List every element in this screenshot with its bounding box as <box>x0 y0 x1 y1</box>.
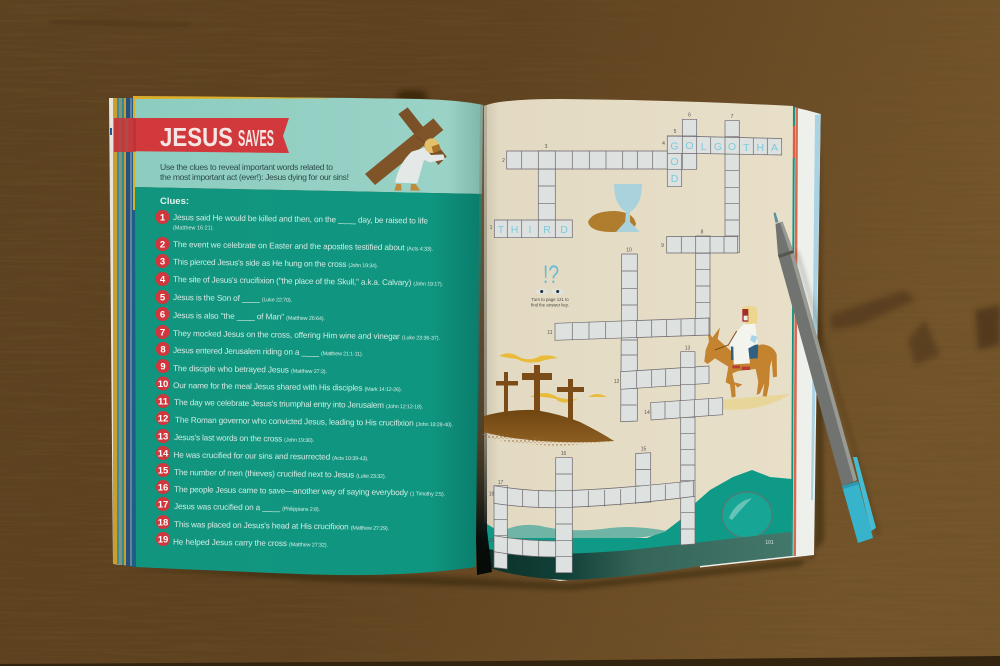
crossword clue numbers: 7 <box>731 114 734 120</box>
crossword clue numbers: 16 <box>561 451 566 457</box>
crossword clue numbers: 9 <box>661 243 664 249</box>
left page: lower teal panel <box>135 187 482 575</box>
clue 9: 9 <box>160 362 166 372</box>
clue 19: 19 <box>158 534 168 546</box>
crossword clue numbers <box>489 112 734 544</box>
clue 11: 11 <box>158 396 169 408</box>
crossword clue numbers: 13 <box>685 346 690 352</box>
clue 16: The people Jesus came to save—another way of saying everybody (1 Timothy 2:5). <box>174 485 445 498</box>
clue 13: Jesus's last words on the cross (John 19:30). <box>174 433 314 444</box>
word 15 down <box>636 453 651 503</box>
clue 4: The site of Jesus's crucifixion ("the place of the Skull," a.k.a. Calvary) (John 19:17). <box>173 275 443 288</box>
crossword clue numbers: 4 <box>662 141 665 147</box>
clue 17: Jesus was crucified on a ____ (Philippians 2:8). <box>174 502 320 513</box>
clue 17: 17 <box>158 500 168 510</box>
word 11 across <box>555 318 709 340</box>
clue 18 <box>156 515 389 532</box>
word 14 across <box>651 398 723 420</box>
word 2 across <box>507 151 697 169</box>
icon: !? with eyes <box>536 261 564 294</box>
clue 6: Jesus is also "the ____ of Man" (Matthew 26:64). <box>173 311 325 322</box>
clue 1: 1 <box>160 212 166 224</box>
illustration: Jesus on donkey <box>704 306 777 398</box>
clue 8: 8 <box>160 344 166 356</box>
illustration: pale wave <box>507 525 667 538</box>
answer key note <box>531 297 569 308</box>
clue 3: 3 <box>160 256 165 268</box>
word 4 across: GOLGOTHA: H <box>757 142 764 154</box>
clue 19: He helped Jesus carry the cross (Matthew 27:32). <box>173 538 328 549</box>
word 4 across: GOLGOTHA: L <box>701 141 707 153</box>
page stack edge, left <box>109 98 136 567</box>
title: JESUS <box>160 122 233 152</box>
word 5 down: GOD: D <box>671 173 679 185</box>
crossword clue numbers: 17 <box>498 480 503 486</box>
right page: dark ground band <box>484 532 792 580</box>
clue 14 <box>156 446 369 462</box>
clue 6 <box>156 307 325 322</box>
illustration: tomb rock <box>722 492 772 538</box>
clue 1: Jesus said He would be killed and then, on the ____ day, be raised to life <box>173 213 429 226</box>
word 1 across: THIRD: D <box>560 224 568 236</box>
illustration: Jesus carrying cross <box>365 107 447 191</box>
clue 1: (Matthew 16:21). <box>173 226 214 232</box>
word 17 down <box>494 486 507 569</box>
banner: SAVES <box>238 125 274 151</box>
intro text: Use the clues to reveal important words related to <box>160 162 333 172</box>
intro text: the most important act (ever!): Jesus dying for our sins! <box>160 172 349 182</box>
word 1 across: THIRD: T <box>498 224 505 236</box>
illustration: Calvary hill <box>482 410 614 446</box>
clue 10: 10 <box>158 379 168 390</box>
right page <box>476 99 793 581</box>
pen tip <box>774 212 778 223</box>
clue 13 <box>156 429 314 444</box>
left page: upper light teal panel <box>133 97 483 194</box>
pen <box>774 212 880 543</box>
clue 10: Our name for the meal Jesus shared with His disciples (Mark 14:12-26). <box>173 381 402 393</box>
clue 9 <box>156 359 327 375</box>
crossword clue numbers: 19 <box>489 538 494 544</box>
book: page shadow <box>130 120 824 590</box>
clue 1 <box>156 210 429 232</box>
word 10 down <box>621 254 637 422</box>
intro text <box>160 162 349 182</box>
word 4 across: GOLGOTHA <box>667 136 782 155</box>
clue 19 <box>156 532 328 549</box>
illustration: ground under donkey <box>722 394 790 410</box>
word 1 across: THIRD: H <box>511 224 518 236</box>
right page: cream background <box>484 99 793 581</box>
crossword clue numbers: 2 <box>502 158 505 164</box>
word 16 down <box>556 458 572 573</box>
word 4 across: GOLGOTHA: O <box>728 141 736 153</box>
clue 15 <box>156 463 386 480</box>
word 1 across: THIRD: R <box>543 224 551 236</box>
word 18 across <box>494 481 693 508</box>
illustration: yellow clouds <box>499 353 607 403</box>
clue 11: The day we celebrate Jesus's triumphal entry into Jerusalem (John 12:12-18). <box>174 398 423 410</box>
crossword clue numbers: 10 <box>626 248 632 254</box>
clue 12 <box>156 411 453 428</box>
clue 15: 15 <box>158 466 169 476</box>
word 6 down <box>682 119 697 169</box>
illustration: tomb hill <box>482 470 792 565</box>
word 5 down: GOD <box>667 136 682 187</box>
clues heading: Clues: <box>160 196 189 207</box>
crossword clue numbers: 3 <box>545 144 548 150</box>
clue 16: 16 <box>158 482 168 494</box>
word 9 across <box>667 236 738 253</box>
left page: yellow border <box>133 96 330 210</box>
pen cap <box>842 481 873 543</box>
icon: !? with eyes: !? <box>543 261 559 289</box>
clue 6: 6 <box>160 310 165 320</box>
word 4 across: GOLGOTHA: O <box>685 140 694 152</box>
crossword clue numbers: 1 <box>490 225 493 231</box>
clue 3: This pierced Jesus's side as He hung on the cross (John 19:34). <box>173 258 378 269</box>
clue 13: 13 <box>158 432 168 442</box>
clue 18: 18 <box>158 518 168 528</box>
word 4 across: GOLGOTHA: A <box>771 142 778 154</box>
clue 7: They mocked Jesus on the cross, offering Him wine and vinegar (Luke 23:36-37). <box>173 329 440 342</box>
word 4 across: GOLGOTHA: G <box>714 141 722 153</box>
crossword clue numbers: 15 <box>641 446 646 452</box>
crossword clue numbers: 12 <box>614 379 619 385</box>
clue 5 <box>156 290 292 304</box>
clue 7: 7 <box>160 328 165 338</box>
crossword clue numbers: 14 <box>644 410 650 416</box>
clue 14: He was crucified for our sins and resurrected (Acts 10:39-43). <box>173 450 369 462</box>
clue 14: 14 <box>158 448 169 460</box>
word 4 across: GOLGOTHA: G <box>670 140 679 152</box>
clue 12: 12 <box>158 414 168 424</box>
crossword clue numbers: 11 <box>547 330 553 336</box>
clue 8: Jesus entered Jerusalem riding on a ____ (Matthew 21:1-11). <box>173 346 363 358</box>
clue 5: 5 <box>160 292 166 304</box>
answer key note: Turn to page 121 to <box>531 297 569 302</box>
clue 15: The number of men (thieves) crucified next to Jesus (Luke 23:32). <box>174 468 386 480</box>
left page <box>114 96 483 575</box>
crossword clue numbers: 5 <box>674 129 677 135</box>
word 19 across <box>494 536 556 557</box>
crossword clue numbers: 8 <box>701 230 704 236</box>
word 5 down: GOD: O <box>670 156 679 168</box>
word 4 across: GOLGOTHA: T <box>743 142 750 154</box>
clue 8 <box>156 342 363 358</box>
word 3 down <box>538 151 555 220</box>
clue 2: 2 <box>160 240 165 250</box>
spine shadow <box>476 105 492 575</box>
illustration: crosses <box>496 365 584 420</box>
clue 12: The Roman governor who convicted Jesus, leading to His crucifixion (John 18:28-40). <box>175 416 453 428</box>
clue 10 <box>156 376 402 393</box>
crossword puzzle <box>489 112 782 573</box>
word 1 across: THIRD <box>494 220 572 238</box>
illustration: bread and chalice <box>588 184 642 232</box>
clue 2: The event we celebrate on Easter and the apostles testified about (Acts 4:33). <box>173 240 433 253</box>
pen shadow <box>795 250 880 536</box>
clue 5: Jesus is the Son of ____ (Luke 22:70). <box>173 293 292 304</box>
right page edge: white page block and colored stripes <box>700 106 821 568</box>
crossword clue numbers: 6 <box>688 112 691 118</box>
answer key note: find the answer key. <box>531 302 569 308</box>
word 13 down <box>681 352 695 545</box>
page number: 101 <box>765 540 774 546</box>
clue 17 <box>156 497 320 513</box>
banner <box>114 118 289 153</box>
clue 9: The disciple who betrayed Jesus (Matthew 27:3). <box>173 364 327 375</box>
word 8 down <box>696 236 710 335</box>
crossword clue numbers: 18 <box>489 492 494 498</box>
clue 16 <box>156 480 445 498</box>
word 1 across: THIRD: I <box>529 224 531 236</box>
clue 4: 4 <box>160 274 166 286</box>
clue 18: This was placed on Jesus's head at His crucifixion (Matthew 27:29). <box>174 520 389 532</box>
word 12 across <box>621 366 709 389</box>
word 7 down <box>725 121 739 253</box>
pen barrel <box>776 222 857 486</box>
